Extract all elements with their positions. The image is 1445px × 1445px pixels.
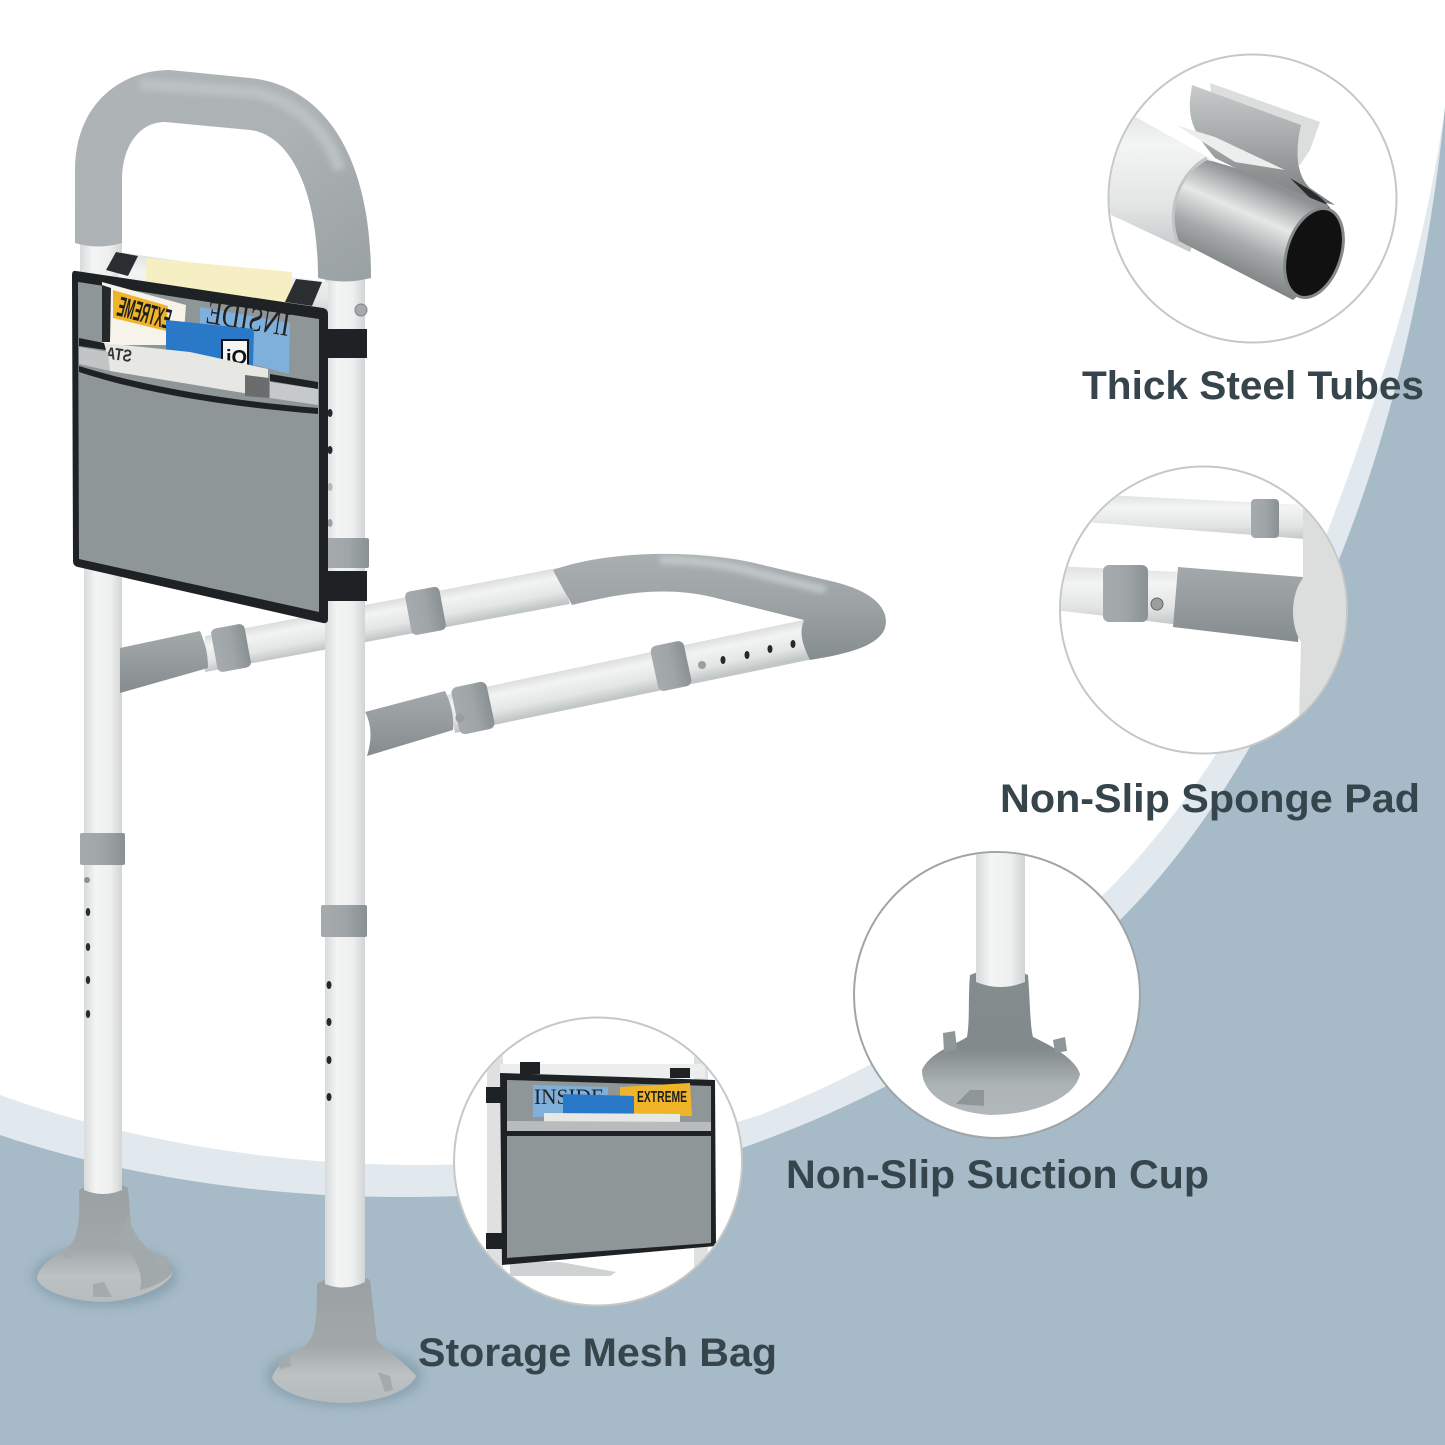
- left foot: suction cup: [33, 1183, 177, 1306]
- detail circle: storage mesh bag: [454, 1018, 742, 1306]
- upper tube collar left: [210, 623, 252, 673]
- lower tube collar right: [650, 640, 692, 692]
- sponge pad: [1173, 567, 1303, 642]
- top handle: grey foam grip: [75, 70, 371, 282]
- lower tube: [510, 1262, 616, 1276]
- newspapers: [104, 343, 269, 398]
- magazine: inside: [533, 1085, 608, 1117]
- left post: [487, 1050, 503, 1275]
- post bolt: [355, 304, 367, 316]
- magazine: extreme: [102, 282, 186, 345]
- upper left post stub: [80, 240, 122, 280]
- newspapers: STA: [105, 344, 133, 366]
- lower horizontal tube: [447, 619, 818, 733]
- inside title: INSIDE: [534, 1084, 604, 1109]
- suction cup: [922, 968, 1080, 1115]
- product: bed assist rail: [33, 70, 886, 1406]
- lower tube pad: [365, 691, 453, 756]
- upper tube collar right: [404, 586, 447, 636]
- bag straps at top: [106, 252, 322, 306]
- bag border: [72, 271, 328, 623]
- right foot: suction cup: [266, 1275, 422, 1406]
- bag panel: [507, 1080, 711, 1258]
- right post: [325, 280, 365, 1288]
- label: thick steel tubes: Thick Steel Tubes: [1082, 364, 1424, 408]
- lower tube collar left: [450, 681, 496, 735]
- lower tube: [1055, 566, 1180, 625]
- label: non-slip suction cup: Non-Slip Suction Cup: [786, 1153, 1209, 1197]
- tube: [976, 850, 1025, 987]
- white outer tube: [1110, 117, 1217, 252]
- magazine: io: iO: [226, 347, 247, 369]
- bag panel: [78, 282, 319, 612]
- upper horizontal tube: [205, 568, 570, 672]
- mesh strip: [507, 1121, 711, 1131]
- pocket binding: [507, 1131, 711, 1136]
- magazine: inside: INSIDE: [204, 294, 293, 344]
- mesh strip right: [270, 382, 318, 405]
- side handle: grey foam grip: [553, 554, 886, 660]
- detail circle: non-slip sponge pad: [1055, 466, 1360, 754]
- newspapers: [544, 1113, 680, 1122]
- left post bolt and holes: [84, 877, 90, 1018]
- magazine: extreme: EXTREME: [114, 291, 174, 335]
- peeled steel sheet: [1190, 85, 1335, 205]
- light film strip: [1176, 125, 1285, 170]
- bag straps: [486, 1062, 690, 1249]
- left post: [84, 560, 122, 1194]
- cylinder rim: [1173, 158, 1207, 243]
- magazine: extreme: [620, 1083, 692, 1116]
- right post collars: [321, 538, 369, 937]
- upper tube: [1085, 494, 1305, 539]
- steel cylinder: [1173, 160, 1340, 300]
- upper pocket binding: [79, 338, 318, 389]
- mesh strip left: [79, 347, 110, 371]
- bolt: [1151, 598, 1163, 610]
- label: non-slip sponge pad: Non-Slip Sponge Pad: [1000, 777, 1420, 821]
- lower collar: [1103, 565, 1148, 622]
- yellow box in bag: [146, 258, 292, 305]
- left post collar: [80, 833, 125, 865]
- lower tube bolts and holes: [456, 640, 796, 722]
- top bar behind bag: [118, 252, 328, 320]
- upper collar: [1251, 499, 1279, 538]
- detail circle: thick steel tubes: [1105, 54, 1396, 342]
- white post: [1293, 508, 1346, 716]
- storage mesh bag: [72, 271, 328, 623]
- detail circle: non-slip suction cup: [854, 850, 1140, 1138]
- extreme title: EXTREME: [637, 1089, 687, 1106]
- right post: [694, 1050, 708, 1275]
- thin film sheet: [1210, 83, 1320, 165]
- magazine: io: [166, 320, 254, 370]
- lower pocket binding: [79, 366, 318, 414]
- top bar: [500, 1064, 705, 1078]
- bag border: [500, 1073, 716, 1265]
- right post holes: [326, 409, 332, 1101]
- upper tube left sponge pad: [120, 631, 208, 693]
- dark crease above cylinder: [1290, 178, 1330, 209]
- magazine: inside: [200, 294, 293, 374]
- magazine: io: [563, 1094, 634, 1114]
- label: storage mesh bag: Storage Mesh Bag: [418, 1331, 777, 1375]
- post straps: [327, 329, 367, 601]
- tube opening: [1283, 208, 1345, 299]
- cup tabs: [943, 1031, 1067, 1106]
